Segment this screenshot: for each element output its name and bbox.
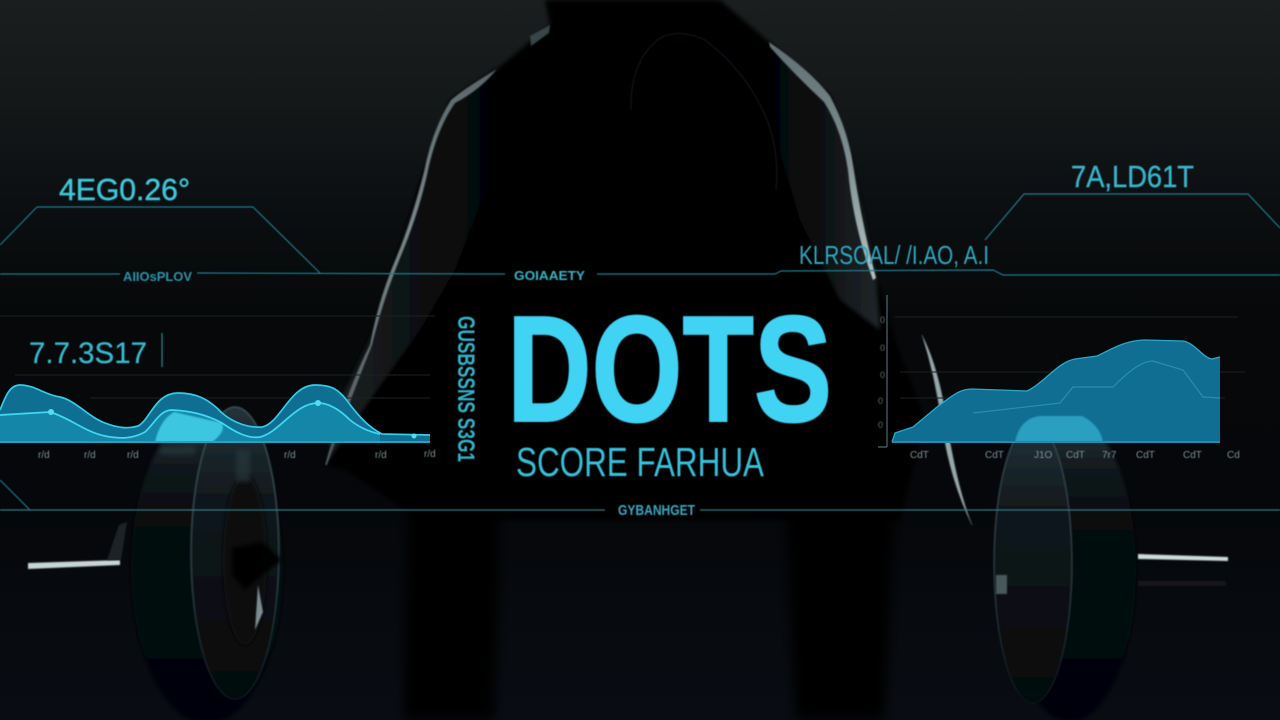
- right forearm rim: [922, 335, 972, 525]
- right bar reflection: [1138, 581, 1226, 586]
- left chart upper area: [0, 385, 430, 442]
- vertical label: GUSBSSNS S3G1: [452, 316, 479, 462]
- left plate top patches: [160, 445, 250, 482]
- left chart axis labels: [38, 449, 436, 461]
- HUD lines: [0, 194, 1280, 510]
- title: DOTS: DOTS: [507, 284, 832, 453]
- right chart axis labels: Cd: [1227, 450, 1240, 461]
- right chart y ticks: 0: [880, 370, 885, 380]
- left stat: lower value: 7.7.3S17: [29, 337, 147, 370]
- right chart axis labels: CdT: [1136, 450, 1155, 461]
- right chart inner line: [973, 361, 1220, 413]
- left plate hub: [232, 542, 282, 590]
- right rim light: [769, 42, 876, 280]
- left chart axis labels: r/d: [127, 450, 139, 461]
- right chart axis labels: CdT: [1183, 450, 1202, 461]
- faint grid lines: [0, 316, 1245, 398]
- right chart axis: [878, 295, 887, 447]
- left collar: [107, 522, 127, 560]
- left stat: top value: 4EG0.26°: [59, 172, 190, 207]
- right area chart: [878, 295, 1220, 447]
- left chart axis labels: r/d: [38, 450, 50, 461]
- right chart top line: [892, 340, 1220, 442]
- right chart axis labels: [910, 450, 1240, 461]
- right chart area: [892, 340, 1220, 442]
- right chart y ticks: 0: [878, 396, 883, 406]
- right stat: top value: 7A,LD61T: [1071, 159, 1194, 194]
- left plate highlight: [255, 585, 263, 630]
- label: upper centre: GOIAAETY: [514, 268, 585, 283]
- right plate outer: [1004, 418, 1136, 720]
- left plate inner shade: [223, 475, 267, 645]
- label: upper left: AIIOsPLOV: [123, 269, 192, 284]
- left chart lower area: [0, 403, 380, 442]
- subtitle: SCORE FARHUA: [516, 439, 764, 485]
- left leg: [403, 500, 500, 720]
- left plate outer: [131, 412, 283, 720]
- left bar: [28, 560, 120, 569]
- right arm shading: [769, 42, 880, 330]
- right chart axis labels: CdT: [985, 450, 1004, 461]
- athlete silhouette: [325, 0, 972, 720]
- right chart y ticks: 0: [878, 420, 883, 430]
- left plate face: [191, 407, 279, 699]
- left area chart: [0, 385, 430, 443]
- right plate face: [994, 423, 1072, 703]
- head outline: [631, 33, 777, 190]
- left chart points: [48, 409, 54, 415]
- left chart axis labels: r/d: [424, 449, 436, 460]
- torso: [325, 0, 925, 520]
- left barbell: [28, 407, 283, 720]
- left rim light: [325, 69, 497, 465]
- right chart y ticks: 0: [880, 343, 885, 353]
- right chart baseline: [892, 441, 1220, 443]
- left plate glow through chart: [155, 412, 223, 442]
- right plate glow through chart: [1015, 416, 1103, 442]
- right leg: [785, 500, 895, 720]
- left chart baseline: [0, 441, 430, 443]
- left shoulder highlight: [530, 25, 550, 46]
- left chart axis labels: r/d: [284, 450, 296, 461]
- right chart axis labels: 7r7: [1102, 450, 1117, 461]
- left chart axis labels: r/d: [84, 450, 96, 461]
- right chart axis labels: J1O: [1034, 450, 1053, 461]
- label: bottom centre: GYBANHGET: [618, 502, 695, 519]
- left arm shading: [327, 69, 497, 462]
- right chart y ticks: 0: [880, 315, 885, 325]
- right plate hub: [996, 575, 1007, 594]
- right chart axis labels: CdT: [1066, 450, 1085, 461]
- right chart y ticks: [878, 315, 885, 430]
- label: upper right: KLRSOAL/ /I.AO, A.I: [799, 240, 989, 270]
- left chart lines: [0, 385, 430, 435]
- right barbell: [994, 418, 1228, 720]
- right chart axis labels: CdT: [910, 450, 929, 461]
- left chart axis labels: r/d: [375, 450, 387, 461]
- right bar: [1138, 554, 1228, 561]
